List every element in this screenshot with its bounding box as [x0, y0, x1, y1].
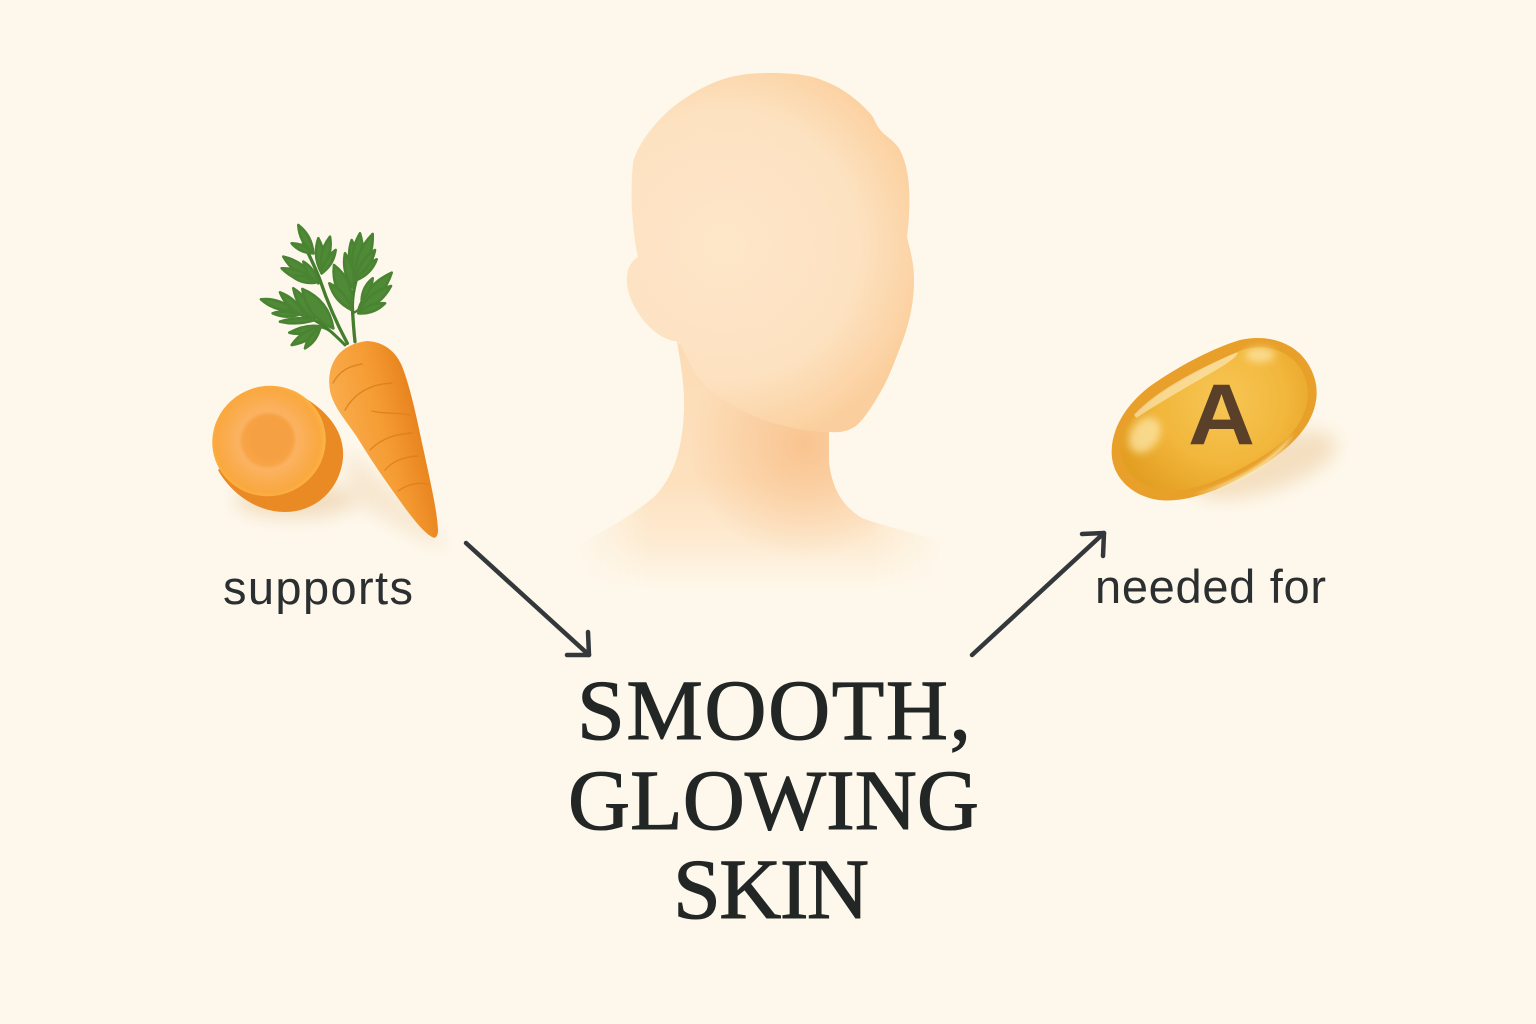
icon: carrot and carrot slice — [197, 225, 448, 548]
icon: vitamin A softgel capsule — [1112, 338, 1344, 513]
face — [627, 73, 914, 432]
slice shadow — [235, 482, 355, 518]
title: smooth, glowing skin — [568, 662, 979, 937]
carrot slice — [197, 370, 343, 512]
title: smooth, glowing skin: SMOOTH, — [577, 662, 971, 758]
icon: head and shoulders silhouette — [596, 73, 924, 576]
capsule shadow — [1186, 417, 1344, 513]
arrow: carrot to skin — [466, 543, 589, 655]
carrot body — [329, 341, 438, 538]
neck and shoulders — [596, 342, 924, 576]
carrot leaves — [261, 225, 392, 348]
label: supports: supports — [223, 561, 413, 614]
capsule body — [1112, 338, 1317, 501]
capsule letter A: A — [1188, 367, 1255, 463]
label: needed for: needed for — [1095, 560, 1326, 613]
carrot shadow — [345, 450, 448, 548]
title: smooth, glowing skin: GLOWING — [568, 752, 979, 848]
arrow: skin to vitamin A — [972, 533, 1104, 655]
title: smooth, glowing skin: SKIN — [673, 841, 869, 937]
